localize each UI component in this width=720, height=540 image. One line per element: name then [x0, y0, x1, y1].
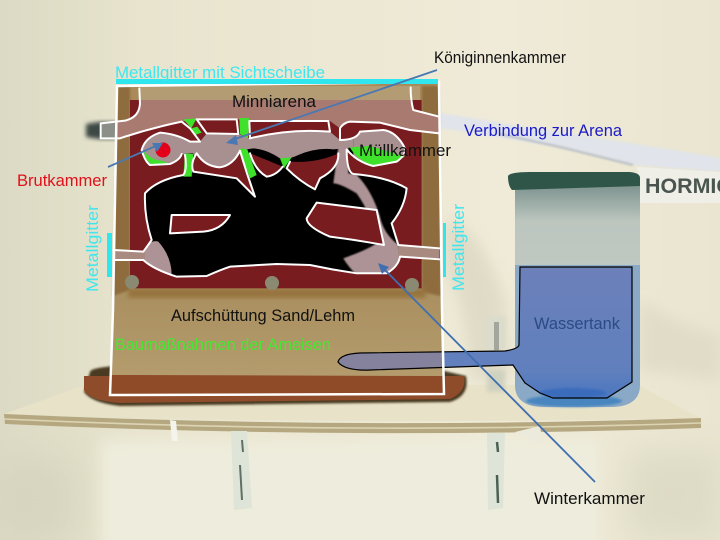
frame outline — [110, 82, 444, 395]
label: Winterkammer: Winterkammer — [534, 489, 645, 508]
label: Wassertank: Wassertank — [534, 314, 620, 333]
shelf bracket left — [170, 420, 252, 510]
label: Baumaßnahmen der Ameisen: Baumaßnahmen der Ameisen — [115, 335, 331, 354]
pink arena band — [101, 100, 439, 138]
clay islands — [170, 151, 384, 245]
label: Minniarena: Minniarena — [232, 92, 317, 111]
brood chamber marker — [156, 142, 170, 158]
small metal post behind pipe — [486, 316, 506, 392]
arrow: Brutkammer — [108, 143, 163, 167]
grid bar right — [443, 223, 446, 277]
water tank and pipe — [338, 267, 632, 398]
arrow: Winterkammer — [378, 263, 595, 482]
connecting tube to arena — [440, 113, 720, 172]
red clay panel — [130, 100, 422, 288]
left pipe — [101, 122, 117, 138]
green construction areas — [143, 118, 405, 178]
label: Metallgitter mit Sichtscheibe: Metallgitter mit Sichtscheibe — [115, 63, 325, 82]
tray — [84, 366, 467, 406]
label: Brutkammer: Brutkammer — [17, 171, 107, 190]
label: Verbindung zur Arena: Verbindung zur Arena — [464, 121, 623, 140]
grid bar left — [107, 233, 112, 277]
shelf bracket right — [487, 426, 543, 510]
label card HORMI — [637, 167, 720, 203]
connector stub left — [86, 122, 118, 139]
label: Aufschüttung Sand/Lehm: Aufschüttung Sand/Lehm — [171, 306, 355, 325]
shelf — [4, 384, 701, 433]
ant nest, drawn in enlarged coordinates — [101, 87, 443, 288]
label: Müllkammer: Müllkammer — [359, 141, 451, 160]
nest interior — [115, 131, 440, 276]
arrow: Königinnenkammer — [226, 70, 437, 145]
white outlines — [101, 87, 439, 277]
label: Metallgitter right: Metallgitter — [449, 204, 468, 291]
wooden board with sand fill — [110, 83, 443, 395]
grid bar top — [116, 79, 438, 84]
label: Königinnenkammer: Königinnenkammer — [434, 48, 566, 67]
screws — [125, 99, 419, 292]
water jar — [508, 172, 640, 407]
label: Metallgitter left: Metallgitter — [83, 205, 102, 292]
